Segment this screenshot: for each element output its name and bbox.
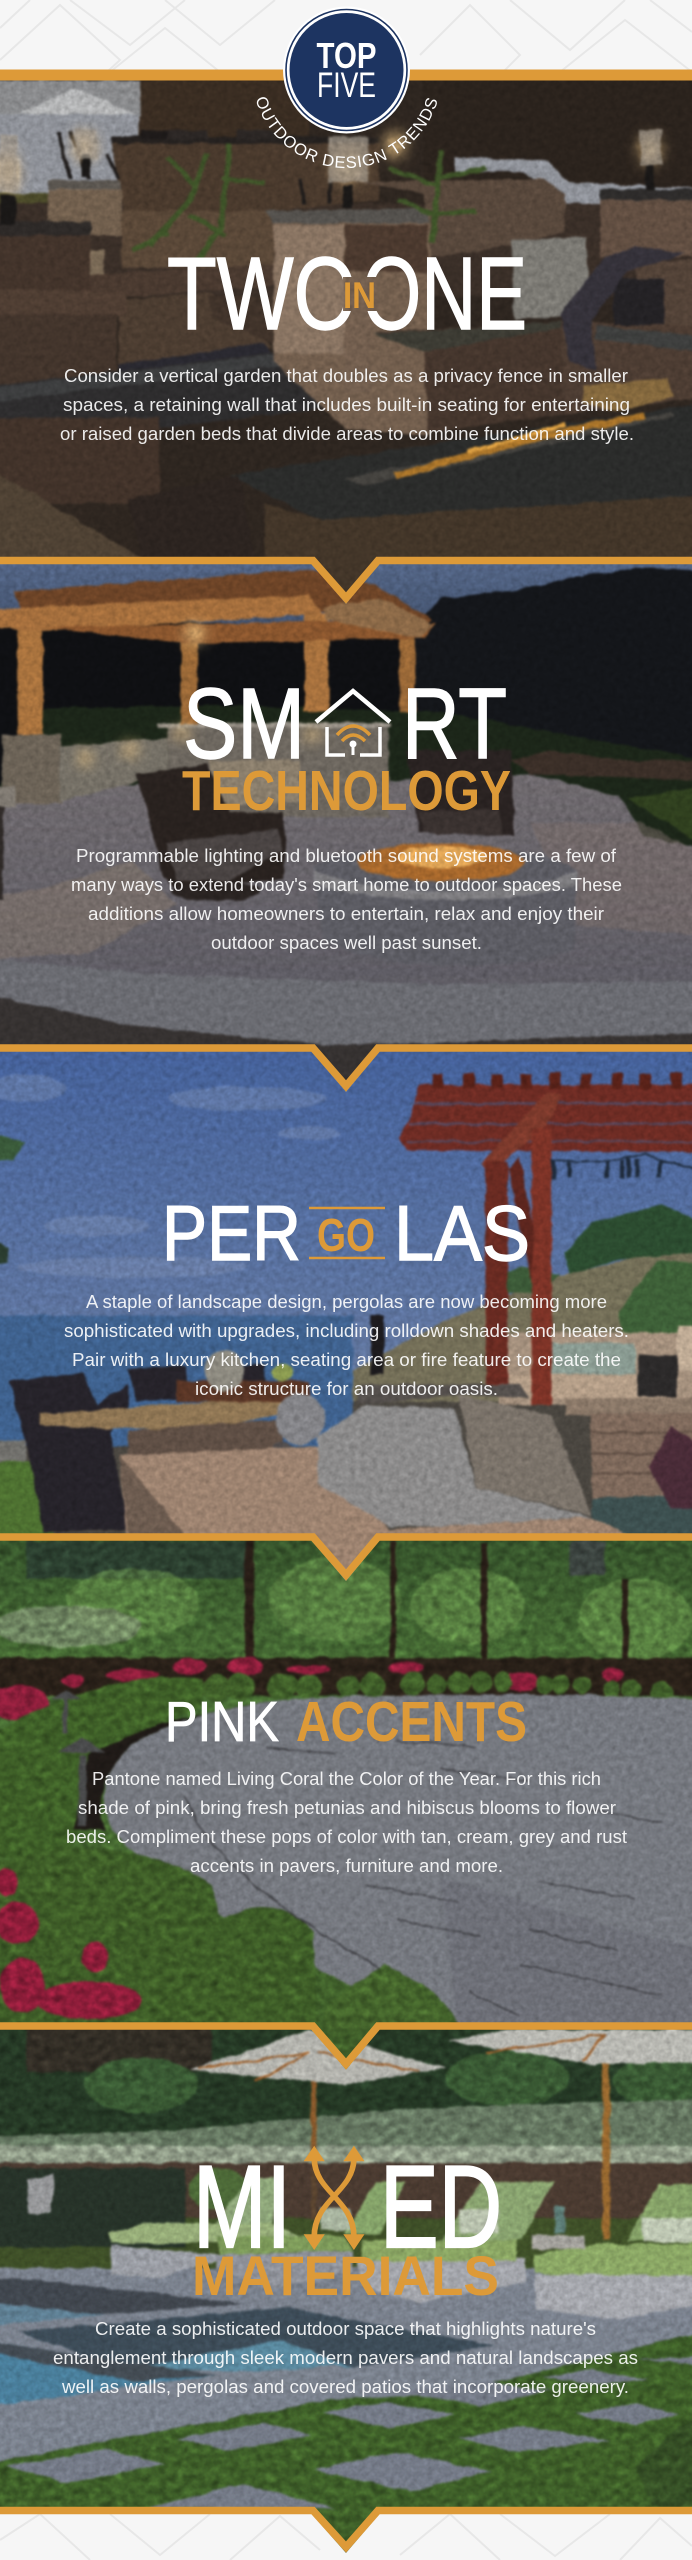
title: mixed [193, 2141, 502, 2272]
body text: pink accents [66, 1769, 627, 1876]
subtitle: technology: TECHNOLOGY [182, 759, 511, 823]
curved tagline: OUTDOOR DESIGN TRENDS [256, 97, 437, 168]
body text: pergolas: Pair with a luxury kitchen, seating area or fire feature to create the [72, 1350, 621, 1370]
title: pergolas: GO [317, 1209, 375, 1261]
logo: top five badge: FIVE [317, 66, 376, 105]
title: two in one: IN [343, 275, 376, 316]
photo: pergola and fire pit at dusk [0, 564, 692, 1092]
title: pink accents: ACCENTS [296, 1690, 527, 1754]
title: mixed: ED [380, 2141, 502, 2272]
body text: pink accents: beds. Compliment these pops of color with tan, cream, grey and rust [66, 1827, 627, 1847]
body text: two in one [60, 366, 634, 444]
panel: smart technology [0, 564, 692, 1092]
title: pergolas: LAS [394, 1189, 530, 1277]
body text: smart technology: additions allow homeowners to entertain, relax and enjoy their [88, 904, 604, 924]
body text: mixed materials [53, 2319, 638, 2397]
body text: pink accents: Pantone named Living Coral the Color of the Year. For this rich [92, 1769, 601, 1789]
body text: pink accents: accents in pavers, furniture and more. [190, 1856, 503, 1876]
photo: pool deck with loungers and stepping stones [0, 2013, 692, 2560]
photo: pergola over ocean view [0, 1033, 692, 1605]
title: smart: SM [183, 668, 305, 780]
icon: intertwined arrows x [304, 2146, 365, 2250]
body text: smart technology: many ways to extend today's smart home to outdoor spaces. These [71, 875, 622, 895]
title: two in one: ONE [362, 236, 527, 351]
panel: mixed materials [0, 2013, 692, 2560]
body text: mixed materials: well as walls, pergolas and covered patios that incorporate greenery. [61, 2377, 629, 2397]
body text: two in one: or raised garden beds that divide areas to combine function and style. [60, 424, 634, 444]
panel: pink accents [0, 1513, 692, 2085]
photo: stone patio with fire table [0, 80, 692, 604]
body text: two in one: spaces, a retaining wall that includes built-in seating for entertaining [63, 395, 630, 415]
logo: top five badge [256, 6, 437, 168]
icon: go lines [309, 1208, 385, 1258]
icon: smart home [316, 691, 390, 755]
body text: pergolas: iconic structure for an outdoor oasis. [195, 1379, 498, 1399]
body text: pergolas [64, 1292, 629, 1399]
panel: two in one [0, 80, 692, 604]
body text: smart technology: outdoor spaces well past sunset. [211, 933, 482, 953]
body text: smart technology [71, 846, 622, 953]
photo: curved paver patio with hedges and flowers [0, 1513, 692, 2085]
body text: pergolas: A staple of landscape design, pergolas are now becoming more [86, 1292, 607, 1312]
title: mixed: MI [193, 2141, 291, 2272]
body text: smart technology: Programmable lighting and bluetooth sound systems are a few of [76, 846, 617, 866]
title: smart: RT [402, 668, 507, 780]
body text: pergolas: sophisticated with upgrades, including rolldown shades and heaters. [64, 1321, 629, 1341]
title: smart [183, 668, 507, 780]
body text: mixed materials: entanglement through sleek modern pavers and natural landscapes as [53, 2348, 638, 2368]
title: pergolas: PER [162, 1189, 301, 1277]
title: two in one [168, 256, 524, 331]
panel: pergolas [0, 1033, 692, 1605]
title: pink accents [165, 1690, 527, 1754]
subtitle: materials: MATERIALS [192, 2244, 499, 2307]
logo: top five badge: TOP [316, 35, 376, 76]
body text: mixed materials: Create a sophisticated outdoor space that highlights nature's [95, 2319, 596, 2339]
title: two in one: TWO [167, 236, 357, 351]
body text: pink accents: shade of pink, bring fresh petunias and hibiscus blooms to flower [78, 1798, 616, 1818]
title: pink accents: PINK [165, 1690, 279, 1754]
body text: two in one: Consider a vertical garden that doubles as a privacy fence in smaller [64, 366, 628, 386]
title: pergolas [162, 1189, 530, 1277]
